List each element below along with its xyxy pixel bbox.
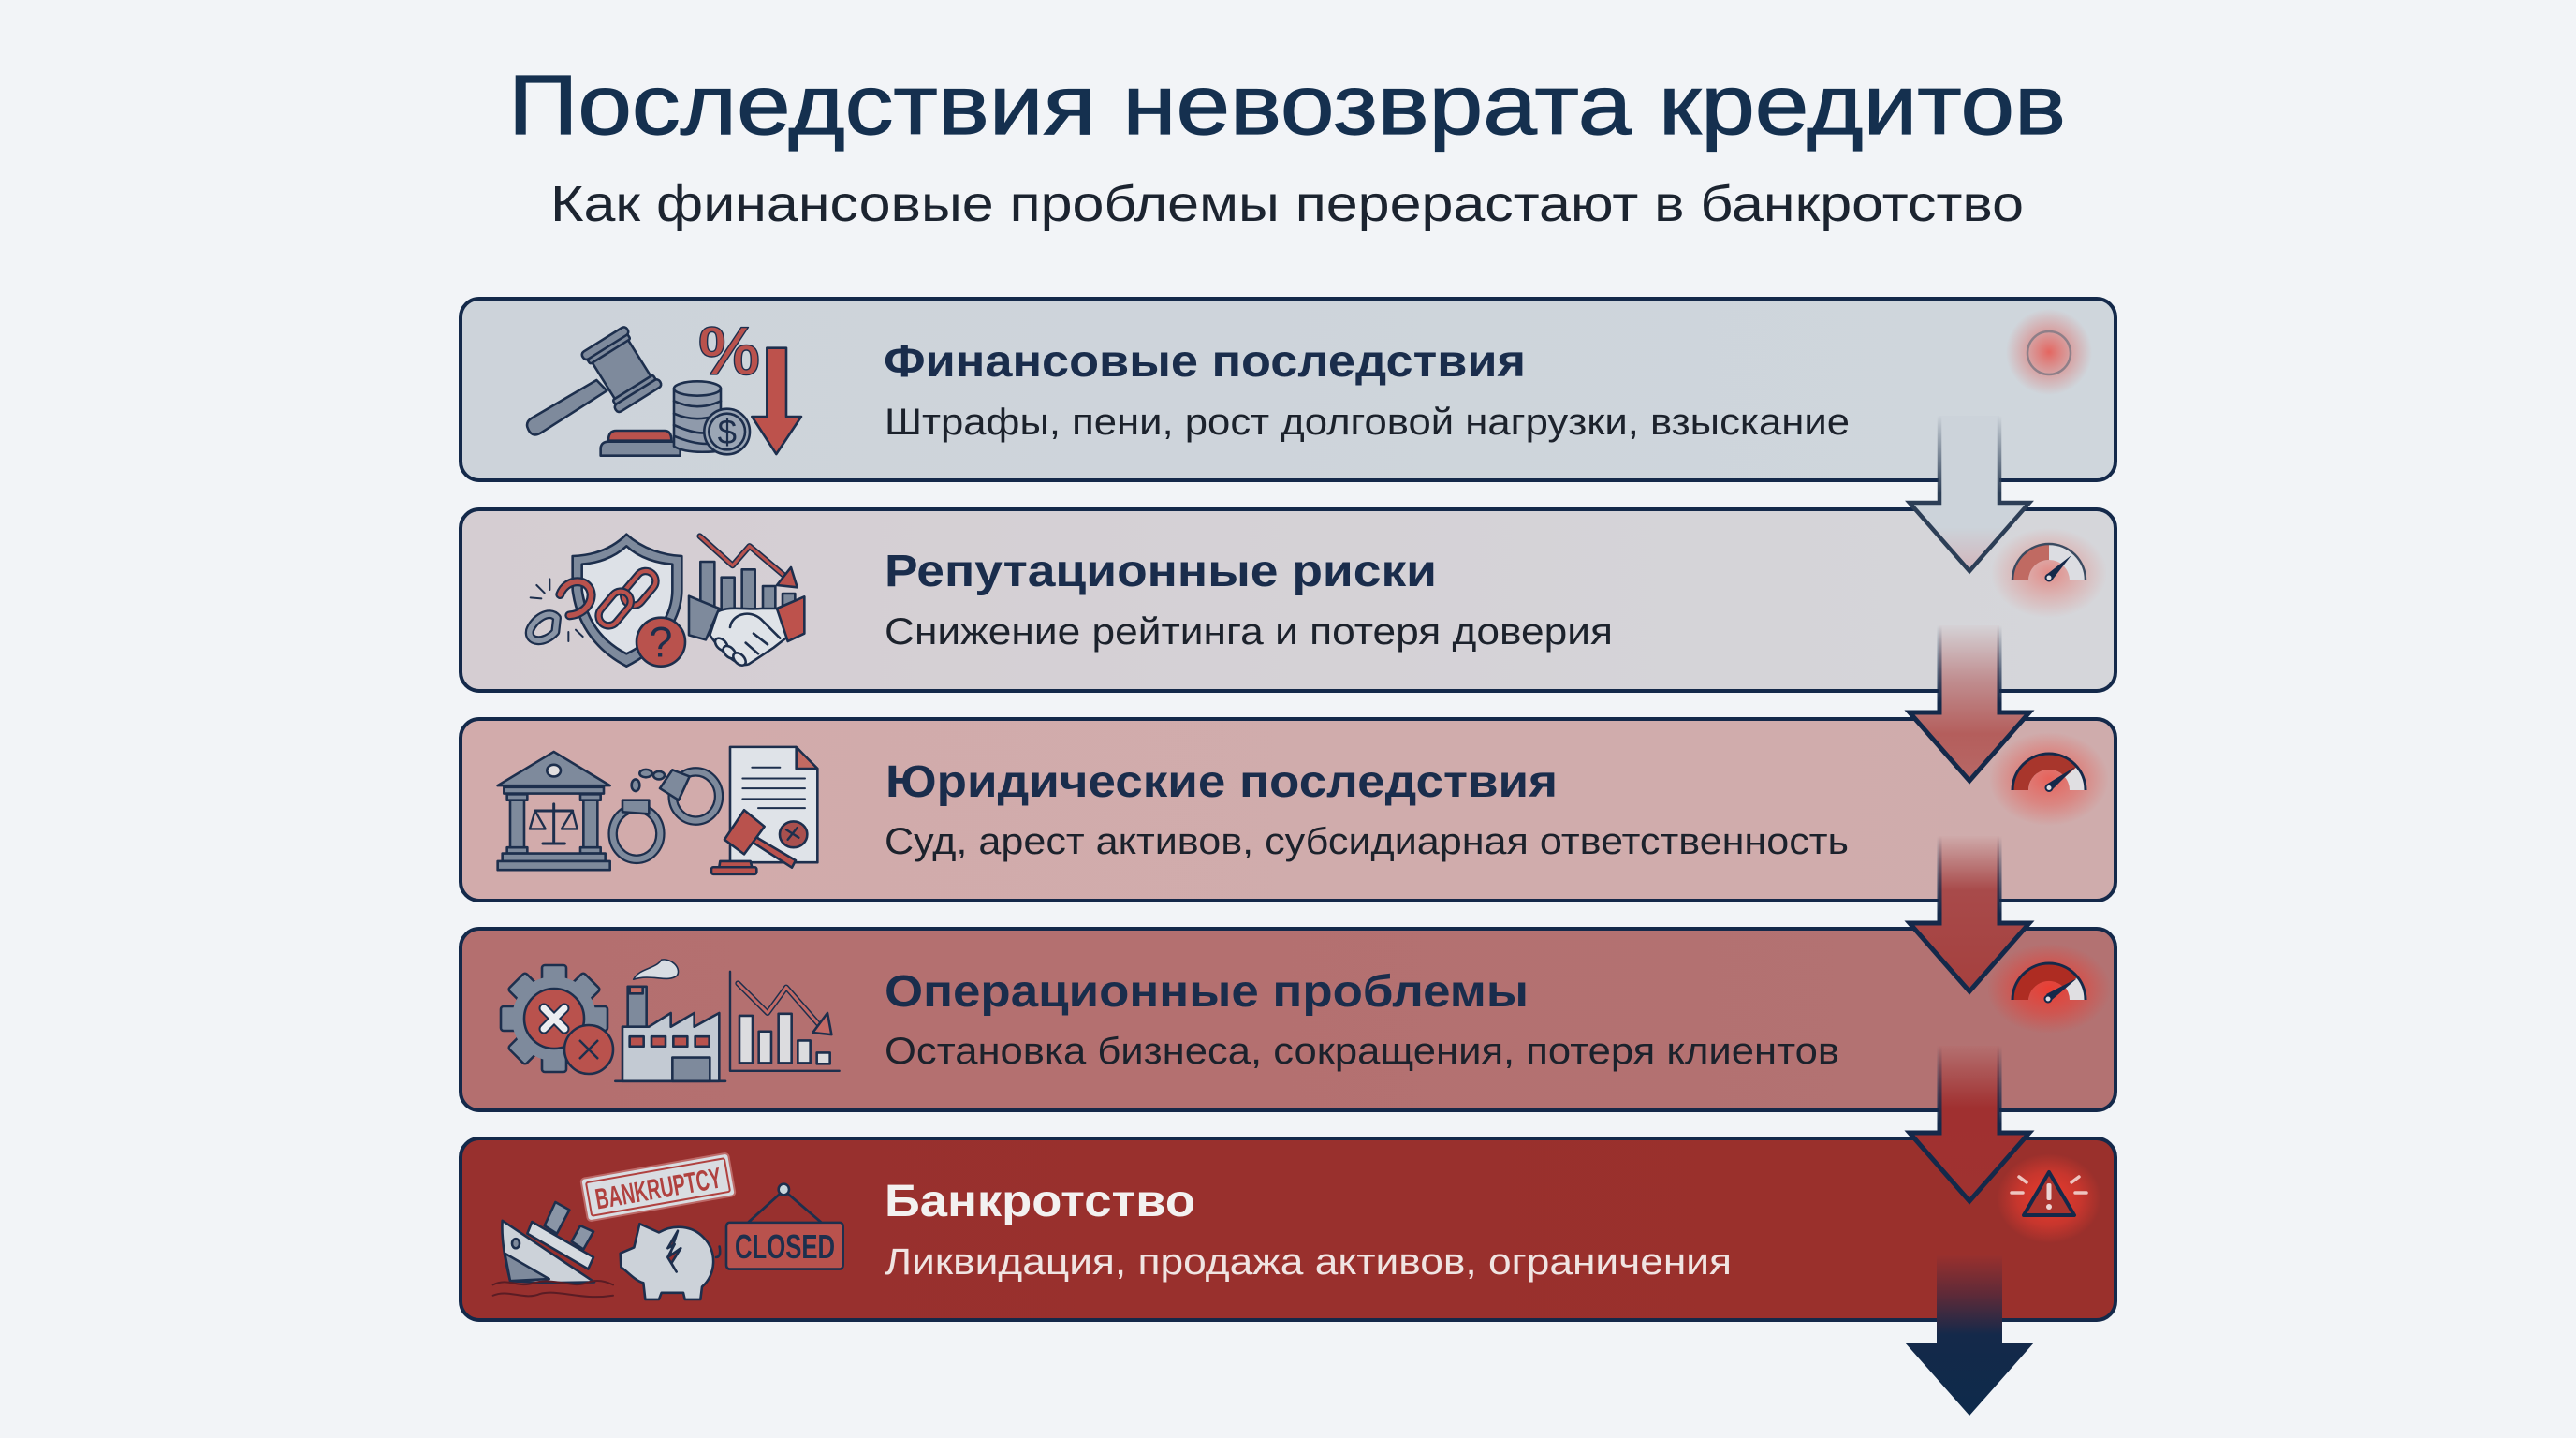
panel: reputational risks bbox=[461, 509, 2115, 691]
heading: reputational: Репутационные риски bbox=[885, 547, 1437, 596]
status: alert triangle bbox=[1997, 1153, 2101, 1243]
icon: gavel, coins, percent, down arrow: $ bbox=[718, 413, 737, 451]
icon: gear, factory, falling chart bbox=[501, 960, 840, 1081]
icon: courthouse, handcuffs, document bbox=[498, 747, 817, 874]
icon: sinking ship, bankruptcy stamp, broken piggy bank, closed sign bbox=[493, 1152, 843, 1299]
status: gauge high bbox=[1987, 944, 2111, 1034]
heading: bankruptcy: Банкротство bbox=[885, 1177, 1195, 1226]
icon: gavel, coins, percent, down arrow bbox=[527, 313, 801, 456]
description: financial: Штрафы, пени, рост долговой нагрузки, взыскание bbox=[885, 402, 1850, 443]
arrow 1 bbox=[1910, 416, 2029, 571]
bankruptcy stamp bbox=[580, 1152, 736, 1222]
panel: bankruptcy bbox=[461, 1138, 2115, 1320]
arrow 3 bbox=[1910, 836, 2029, 991]
heading: operational: Операционные проблемы bbox=[885, 967, 1529, 1017]
panel: financial consequences bbox=[461, 299, 2115, 480]
arrow 4 bbox=[1910, 1046, 2029, 1201]
heading: financial: Финансовые последствия bbox=[884, 337, 1526, 387]
icon: shield, broken chain, chart, handshake bbox=[530, 535, 804, 668]
heading: legal: Юридические последствия bbox=[886, 757, 1558, 807]
description: reputational: Снижение рейтинга и потеря доверия bbox=[885, 611, 1613, 653]
description: legal: Суд, арест активов, субсидиарная ответственность bbox=[885, 821, 1849, 862]
arrow 5 bbox=[1905, 1255, 2034, 1416]
status: gauge medium bbox=[1989, 732, 2109, 826]
title: Последствия невозврата кредитов bbox=[508, 59, 2066, 153]
description: bankruptcy: Ликвидация, продажа активов, ограничения bbox=[885, 1241, 1732, 1283]
bankruptcy stamp: BANKRUPTCY bbox=[593, 1161, 724, 1216]
icon: shield, broken chain, chart, handshake: ? bbox=[649, 619, 672, 667]
description: operational: Остановка бизнеса, сокращения, потеря клиентов bbox=[885, 1031, 1839, 1072]
gear bbox=[501, 965, 613, 1074]
status: gauge low bbox=[1991, 528, 2107, 618]
status: red dot bbox=[2006, 309, 2092, 395]
panel: legal consequences bbox=[461, 719, 2115, 901]
subtitle: Как финансовые проблемы перерастают в банкротство bbox=[550, 176, 2024, 232]
icon: gavel, coins, percent, down arrow: % bbox=[698, 313, 760, 389]
arrow 2 bbox=[1910, 625, 2029, 781]
panel: operational problems bbox=[461, 929, 2115, 1110]
closed label: CLOSED bbox=[735, 1227, 835, 1266]
